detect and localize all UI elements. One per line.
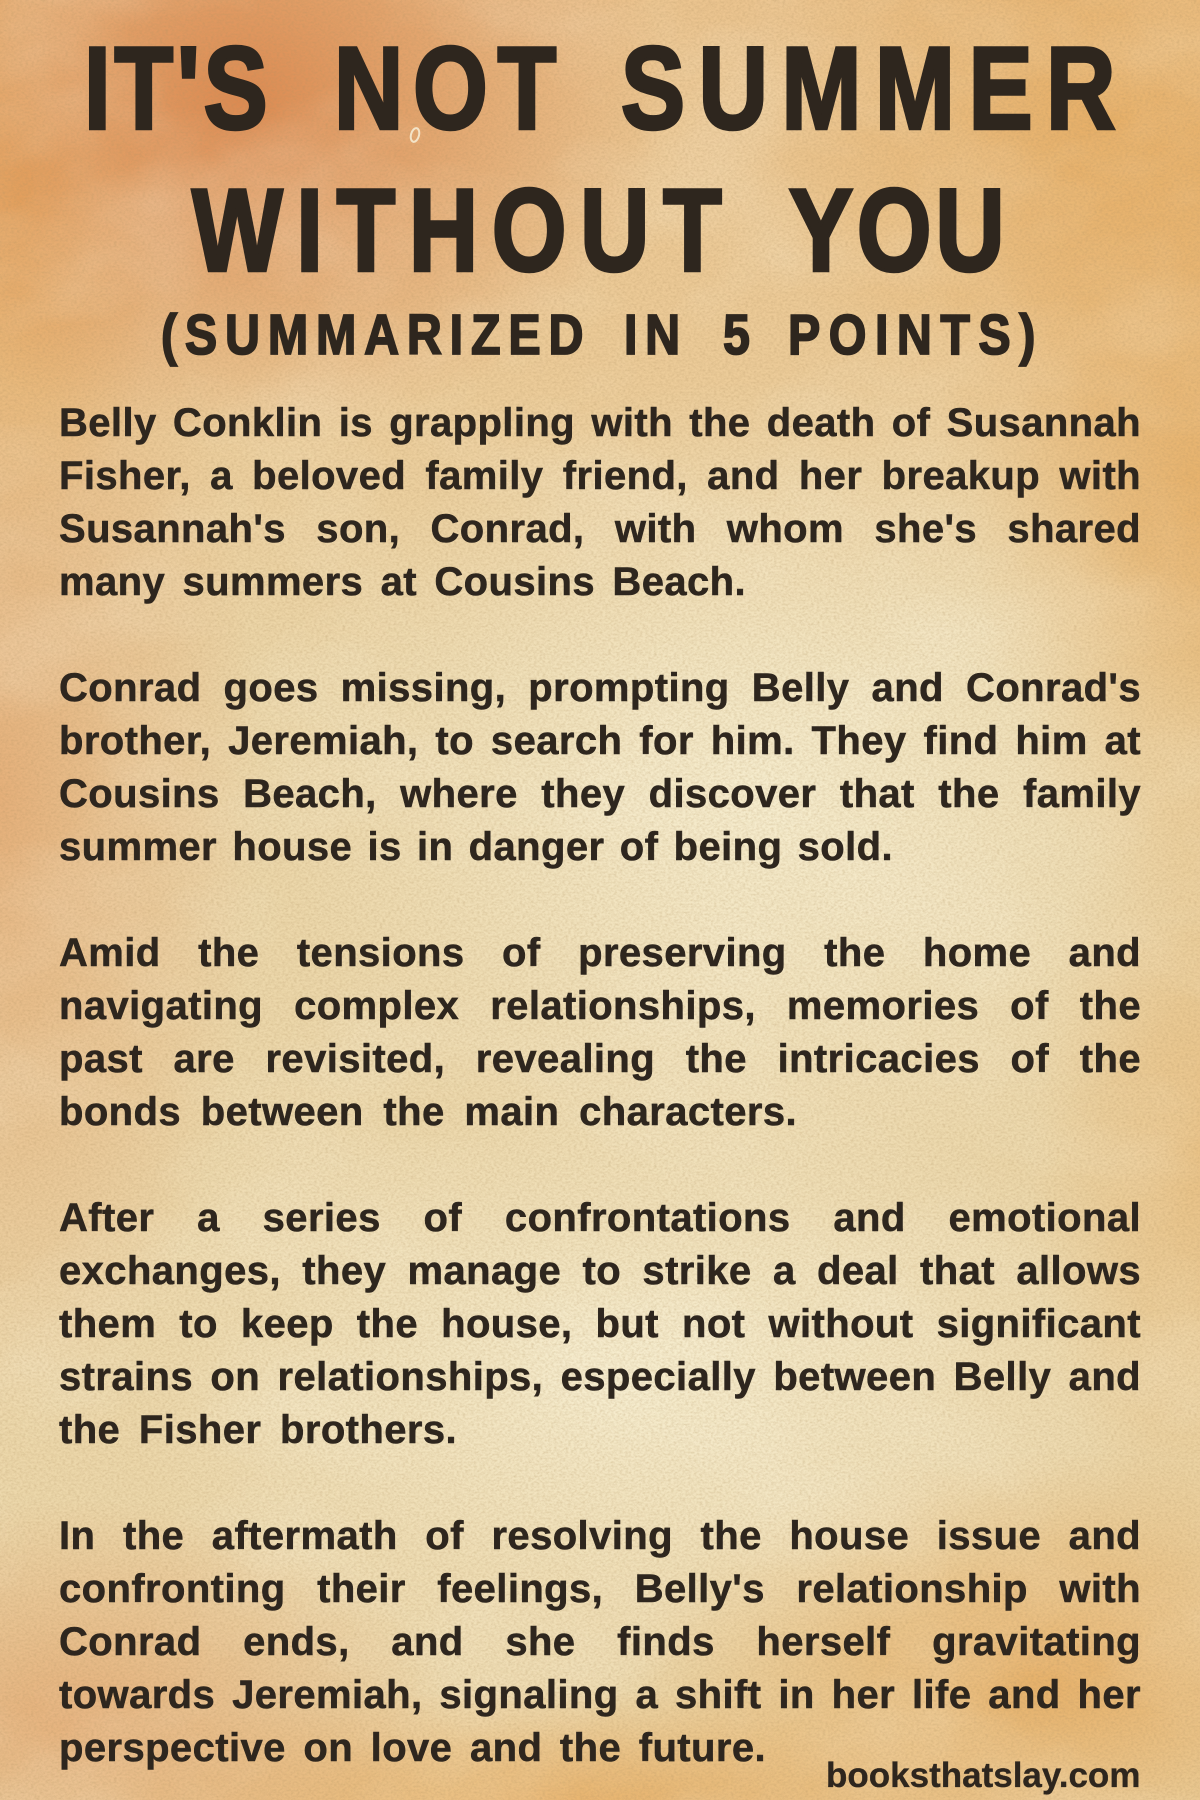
- paragraph 2: brother, Jeremiah, to search for him. They find him at: [59, 719, 1141, 763]
- subtitle: POINTS): [788, 303, 1035, 367]
- paragraph 5: [59, 1514, 1141, 1770]
- title: SUMMER: [621, 22, 1115, 154]
- paragraph 5: confronting their feelings, Belly's relationship with: [59, 1567, 1141, 1611]
- paragraph 1: [59, 401, 1141, 604]
- paragraph 5: perspective on love and the future.: [59, 1726, 766, 1770]
- paragraph 2: summer house is in danger of being sold.: [59, 825, 893, 869]
- paragraph 4: strains on relationships, especially between Belly and: [59, 1355, 1141, 1399]
- subtitle: (SUMMARIZED: [161, 303, 583, 367]
- paragraph 3: navigating complex relationships, memories of the: [59, 984, 1141, 1028]
- paragraph 2: [59, 666, 1141, 869]
- paragraph 4: the Fisher brothers.: [59, 1408, 457, 1452]
- paragraph 5: In the aftermath of resolving the house issue and: [59, 1514, 1141, 1558]
- footer: website: booksthatslay.com: [826, 1756, 1140, 1795]
- subtitle: [161, 303, 1035, 367]
- paragraph 1: Belly Conklin is grappling with the death of Susannah: [59, 401, 1141, 445]
- paragraph 4: them to keep the house, but not without significant: [59, 1302, 1141, 1346]
- paragraph 5: Conrad ends, and she finds herself gravitating: [59, 1620, 1141, 1664]
- paragraph 3: bonds between the main characters.: [59, 1090, 797, 1134]
- paragraph 5: towards Jeremiah, signaling a shift in her life and her: [59, 1673, 1141, 1717]
- subtitle: IN: [624, 303, 680, 367]
- title: NOT: [334, 22, 556, 154]
- paragraph 4: exchanges, they manage to strike a deal that allows: [59, 1249, 1141, 1293]
- paragraph 2: Conrad goes missing, prompting Belly and Conrad's: [59, 666, 1141, 710]
- paragraph 1: Fisher, a beloved family friend, and her breakup with: [59, 454, 1141, 498]
- paragraph 1: Susannah's son, Conrad, with whom she's shared: [59, 507, 1141, 551]
- title: IT'S: [84, 22, 268, 154]
- paragraph 3: [59, 931, 1141, 1134]
- title: [84, 22, 1116, 290]
- paragraph 4: After a series of confrontations and emotional: [59, 1196, 1141, 1240]
- paragraph 1: many summers at Cousins Beach.: [59, 560, 746, 604]
- paragraph 2: Cousins Beach, where they discover that the family: [59, 772, 1141, 816]
- subtitle: 5: [723, 303, 750, 367]
- paragraph 4: [59, 1196, 1141, 1452]
- paragraph 3: Amid the tensions of preserving the home and: [59, 931, 1141, 975]
- paragraph 3: past are revisited, revealing the intricacies of the: [59, 1037, 1141, 1081]
